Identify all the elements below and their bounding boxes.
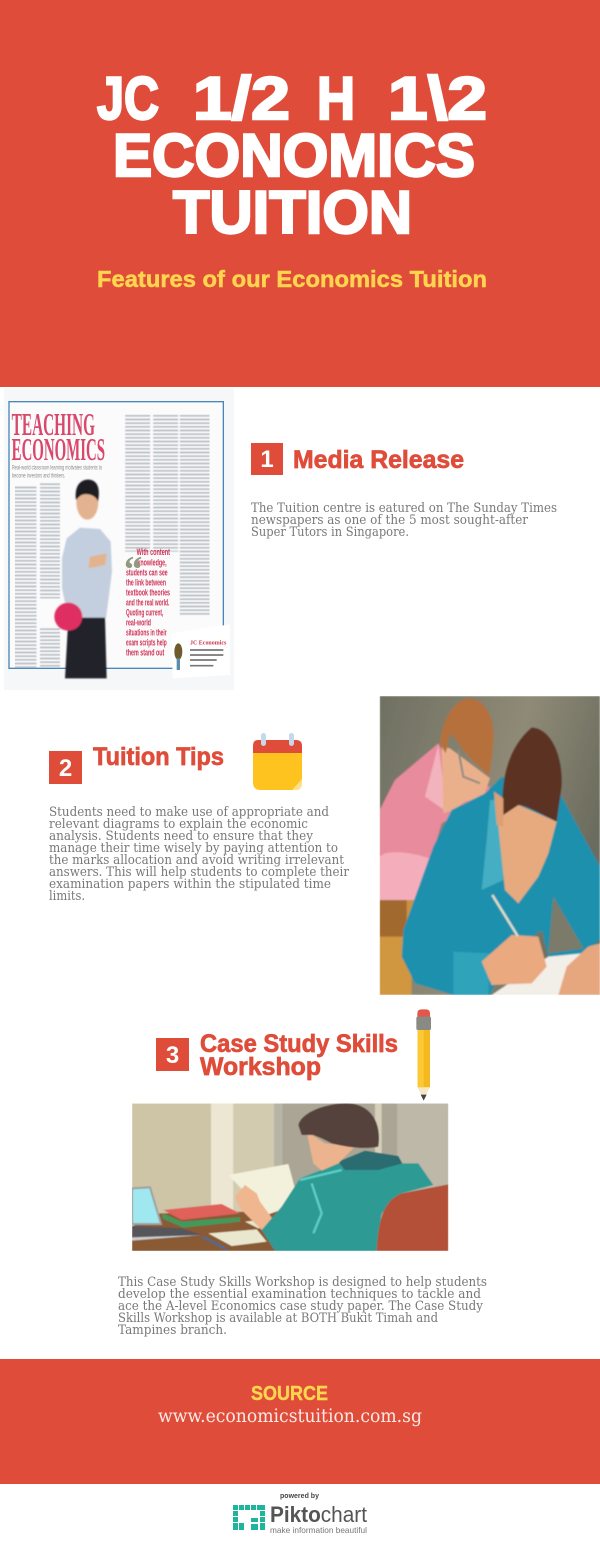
pull quote: situations in their (126, 627, 167, 637)
pull quote: With content (137, 547, 170, 557)
pull quote: students can see (126, 567, 168, 577)
heading: case study skills workshop: Case Study Skills (200, 1030, 398, 1058)
number badge 1 (251, 443, 283, 475)
heading: media release: Media Release (293, 446, 464, 474)
heading: case study skills workshop: Workshop (200, 1053, 321, 1081)
text: case study workshop (118, 1275, 487, 1338)
panel: media release newspaper clipping: Real-world classroom learning motivates students to (12, 465, 102, 472)
heading: case study skills workshop (200, 1030, 398, 1081)
pull quote: exam scripts help (126, 637, 167, 647)
number badge 3: 3 (166, 1042, 179, 1069)
text: case study workshop: This Case Study Skills Workshop is designed to help students (118, 1275, 487, 1290)
heading: tuition tips: Tuition Tips (93, 743, 224, 771)
pull quote: them stand out (126, 647, 164, 657)
piktochart logo: make information beautiful (270, 1525, 367, 1535)
title (97, 65, 487, 246)
title: JC (97, 65, 159, 132)
pull quote: real-world (126, 617, 151, 627)
title: H (317, 65, 355, 132)
piktochart logo: Piktochart (270, 1502, 367, 1527)
pull quote: and the real world. (126, 597, 169, 607)
text: media release (251, 501, 557, 540)
text: tuition tips: relevant diagrams to explain the economic (49, 817, 308, 832)
icon: piktochart mark (233, 1505, 265, 1530)
panel: media release newspaper clipping: TEACHING (12, 406, 95, 442)
icon: pencil (416, 1009, 431, 1101)
panel: media release newspaper clipping: become investors and thinkers. (12, 473, 65, 480)
subtitle: Features of our Economics Tuition (97, 266, 487, 292)
text: media release: newspapers as one of the 5 most sought-after (251, 513, 529, 528)
text: tuition tips (49, 805, 350, 904)
source label: SOURCE (251, 1383, 328, 1405)
source band (0, 1359, 600, 1484)
text: tuition tips: Students need to make use of appropriate and (49, 805, 329, 820)
title: ECONOMICS (113, 122, 475, 189)
icon: calendar (253, 733, 302, 790)
number badge 1: 1 (260, 446, 274, 473)
panel: media release newspaper clipping: ECONOMICS (12, 431, 105, 467)
pull quote: the link between (126, 577, 166, 587)
text: tuition tips: limits. (49, 889, 85, 904)
pull quote (126, 547, 170, 657)
panel: media release newspaper clipping: JC Economics (190, 640, 227, 646)
pull quote: textbook theories (126, 587, 170, 597)
title: TUITION (173, 179, 412, 246)
text: tuition tips: examination papers within the stipulated time (49, 877, 331, 892)
number badge 2 (49, 751, 82, 784)
piktochart logo (233, 1493, 367, 1535)
pull quote: knowledge, (137, 557, 167, 567)
panel: media release newspaper clipping: “ (124, 549, 142, 590)
text: case study workshop: ace the A-level Economics case study paper. The Case Study (118, 1299, 484, 1314)
panel: media release newspaper clipping (4, 388, 234, 690)
pull quote: Quoting current, (126, 607, 163, 617)
header band (0, 0, 600, 387)
illustration: student studying case paper (132, 1103, 448, 1251)
title: 1\2 (388, 65, 487, 132)
number badge 3 (156, 1038, 189, 1071)
text: media release: The Tuition centre is eatured on The Sunday Times (251, 501, 557, 516)
piktochart logo: powered by (280, 1493, 319, 1500)
number badge 2: 2 (59, 755, 72, 782)
text: case study workshop: develop the essential examination techniques to tackle and (118, 1287, 481, 1302)
text: tuition tips: manage their time wisely by paying attention to (49, 841, 338, 856)
text: tuition tips: the marks allocation and avoid writing irrelevant (49, 853, 345, 868)
text: tuition tips: analysis. Students need to ensure that they (49, 829, 314, 844)
text: media release: Super Tutors in Singapore. (251, 525, 409, 540)
text: tuition tips: answers. This will help students to complete their (49, 865, 350, 880)
title: 1/2 (193, 65, 290, 132)
illustration: students writing an exam (380, 696, 600, 995)
text: case study workshop: Skills Workshop is available at BOTH Bukit Timah and (118, 1311, 438, 1326)
text: case study workshop: Tampines branch. (118, 1323, 227, 1338)
source url: www.economicstuition.com.sg (158, 1405, 422, 1427)
